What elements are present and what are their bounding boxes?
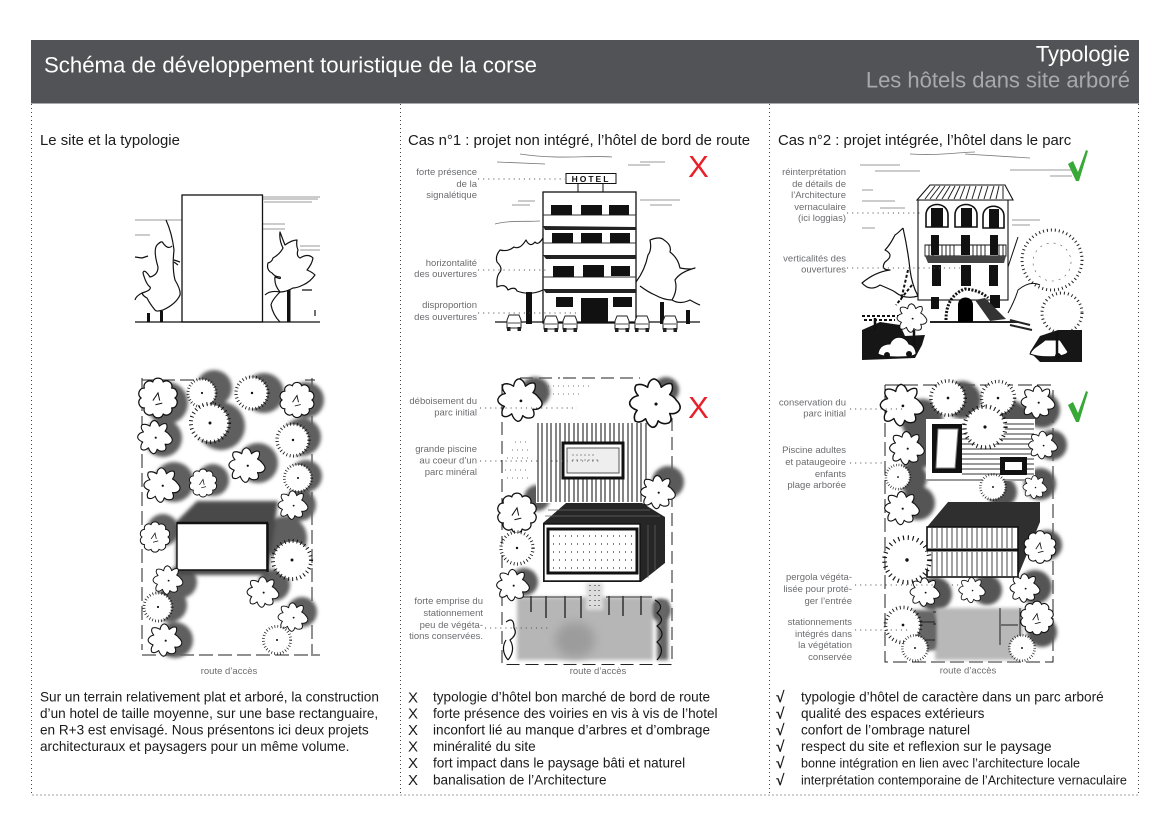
list: benefits: √	[776, 740, 785, 756]
annotations: elevation: de la	[456, 179, 478, 190]
annotations: elevation: disproportion	[422, 300, 477, 311]
section name: Typologie	[1036, 42, 1130, 66]
ground and pergola	[862, 322, 925, 360]
list: benefits: interprétation contemporaine de l’Architecture vernaculaire	[801, 774, 1127, 788]
annotations: plan: peu de végéta-	[420, 620, 483, 631]
text block: site description	[40, 690, 379, 754]
list: benefits: qualité des espaces extérieurs	[801, 706, 985, 721]
list: drawbacks: X	[408, 722, 418, 739]
annotations: plan: déboisement du	[409, 396, 477, 407]
list: drawbacks: X	[408, 772, 418, 789]
header band	[31, 40, 1139, 104]
cars	[878, 337, 916, 357]
annotations: plan: grande piscine	[415, 444, 477, 455]
annotations: elevation: de détails de	[792, 179, 846, 190]
check mark: elevation	[1068, 150, 1088, 181]
list: drawbacks: X	[408, 738, 418, 756]
annotations: elevation: (ici loggias)	[798, 213, 846, 224]
left tree	[862, 228, 918, 297]
list: drawbacks: X	[408, 755, 418, 772]
annotations: plan: tions conservées.	[409, 631, 483, 642]
annotations: plan: stationnement	[423, 608, 483, 619]
sign: hotel	[566, 174, 616, 192]
sketch: hotel in the park elevation	[860, 152, 1082, 362]
heading: column 3: Cas n°2 : projet intégrée, l’hôtel dans le parc	[778, 133, 1072, 149]
sketch: site plan	[138, 370, 324, 658]
parking	[935, 608, 1023, 660]
annotations: elevation	[782, 167, 960, 276]
annotations: elevation: des ouvertures	[414, 312, 477, 323]
annotations: plan: intégrés dans	[795, 629, 852, 640]
cross: plan: X	[688, 390, 709, 425]
sketch: hotel elevation	[495, 154, 700, 332]
list: drawbacks	[408, 690, 718, 789]
annotations: plan: stationnements	[788, 617, 852, 628]
list: benefits: typologie d’hôtel de caractère dans un parc arboré	[801, 690, 1104, 704]
annotations: plan	[779, 398, 960, 663]
annotations: elevation: forte présence	[416, 167, 477, 178]
list: benefits: √	[776, 756, 785, 772]
hotel roof and footprint	[543, 503, 665, 582]
loggias	[926, 204, 948, 227]
list: benefits: bonne intégration en lien avec l’architecture locale	[801, 756, 1080, 770]
children pool	[1000, 457, 1027, 475]
list: benefits	[776, 690, 1127, 789]
annotations: elevation: ouvertures	[801, 264, 846, 276]
text block: site description: d’un hotel de taille moyenne, sur une base rectanguaire,	[40, 706, 378, 721]
list: drawbacks: X	[408, 706, 418, 722]
list: benefits: √	[776, 773, 785, 789]
text block: site description: en R+3 est envisagé. Nous présentons ici deux projets	[40, 722, 369, 738]
building	[918, 200, 1008, 300]
annotations: elevation: horizontalité	[426, 258, 477, 269]
annotations: elevation: réinterprétation	[782, 167, 846, 178]
text block: site description: Sur un terrain relativement plat et arboré, la construction	[40, 690, 379, 704]
list: drawbacks: typologie d’hôtel bon marché de bord de route	[433, 690, 710, 704]
list: benefits: respect du site et reflexion sur le paysage	[801, 739, 1052, 754]
heading: column 1: Le site et la typologie	[40, 133, 180, 149]
text block: site description: architecturaux et paysagers pour un même volume.	[40, 739, 349, 754]
annotations: plan: la végétation	[798, 640, 852, 651]
annotations: elevation	[414, 167, 580, 323]
panel: cas n°1	[408, 133, 750, 789]
caption: route d'accès: route d’accès	[940, 666, 996, 676]
hotel roof and pergola	[927, 502, 1040, 576]
annotations: elevation: l’Architecture	[791, 190, 846, 201]
section subtitle: Les hôtels dans site arboré	[866, 68, 1130, 92]
annotations: plan: lisée pour proté-	[783, 584, 852, 595]
list: drawbacks: fort impact dans le paysage bâti et naturel	[433, 756, 685, 770]
annotations: plan: parc initial	[803, 408, 846, 420]
list: benefits: √	[776, 706, 785, 722]
balcony	[925, 245, 1006, 256]
annotations: plan: forte emprise du	[414, 596, 483, 607]
swimming pool	[932, 424, 962, 473]
heading: column 2: Cas n°1 : projet non intégré, l’hôtel de bord de route	[408, 133, 750, 149]
list: benefits: √	[776, 723, 785, 739]
caption: route d'accès: route d’accès	[201, 666, 257, 677]
annotations: plan: enfants	[815, 469, 846, 480]
panel: le site et la typologie	[40, 133, 379, 754]
annotations: plan: au coeur d’un	[419, 456, 477, 466]
swimming pool	[563, 443, 623, 478]
entrance walkway	[586, 583, 603, 610]
list: drawbacks: X	[408, 690, 418, 706]
house footprint	[177, 523, 267, 570]
annotations: plan: Piscine adultes	[782, 445, 846, 456]
cross: elevation: X	[688, 149, 709, 184]
sketch: hotel in the park plan	[880, 381, 1067, 662]
list: drawbacks: banalisation de l’Architecture	[433, 772, 607, 788]
check mark: plan	[1068, 391, 1088, 422]
annotations: plan: conservation du	[779, 398, 846, 408]
sketch: site elevation	[135, 195, 320, 322]
annotations: elevation: verticalités des	[783, 254, 846, 264]
list: benefits: √	[776, 690, 785, 706]
annotations: plan: parc minéral	[425, 467, 477, 478]
title: Schéma de développement touristique de la corse	[44, 52, 537, 78]
hedges beside parking	[503, 620, 515, 660]
sign: hotel: HOTEL	[572, 174, 610, 184]
annotations: plan: conservée	[808, 652, 852, 663]
annotations: plan: plage arborée	[787, 480, 846, 491]
pool deck	[926, 419, 1035, 481]
annotations: elevation: des ouvertures	[414, 269, 477, 280]
house shadow and roof	[176, 501, 278, 575]
building	[543, 192, 636, 323]
parking	[517, 597, 653, 660]
annotations: plan: parc initial	[434, 408, 477, 418]
annotations: elevation: vernaculaire	[794, 202, 846, 213]
right trees	[1022, 230, 1082, 290]
list: benefits: confort de l’ombrage naturel	[801, 722, 970, 738]
caption: route d'accès: route d’accès	[570, 666, 626, 677]
annotations: plan: pergola végéta-	[786, 572, 852, 583]
list: drawbacks: forte présence des voiries en vis à vis de l’hotel	[433, 706, 718, 721]
pool deck	[536, 423, 647, 503]
annotations: plan: et pataugeoire	[785, 457, 846, 468]
annotations: plan: ger l’entrée	[804, 596, 852, 607]
panel: cas n°2	[776, 133, 1127, 789]
sketch: hotel plan	[497, 377, 684, 664]
annotations: plan	[409, 396, 600, 642]
list: drawbacks: minéralité du site	[433, 739, 536, 754]
annotations: elevation: signalétique	[426, 190, 477, 201]
list: drawbacks: inconfort lié au manque d’arbres et d’ombrage	[433, 722, 710, 738]
